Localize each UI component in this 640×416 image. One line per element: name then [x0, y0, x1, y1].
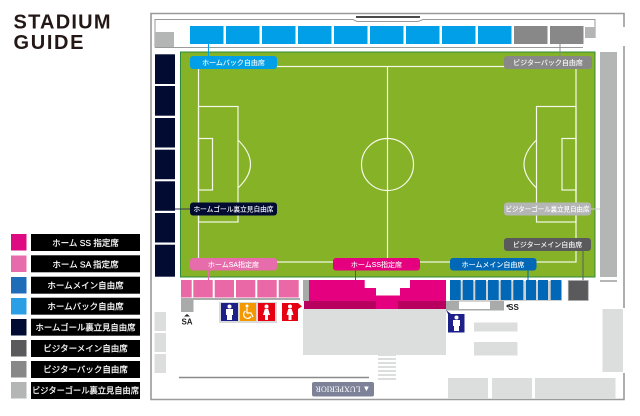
legend: home goal: ホームゴール裏立見自由席: [36, 322, 136, 332]
label: visitor goal: [504, 202, 591, 216]
legend: home goal: [11, 319, 140, 336]
legend: home main: ホームメイン自由席: [47, 280, 124, 290]
legend: home SA: ホーム SA 指定席: [52, 260, 119, 270]
title: STADIUM: [14, 12, 110, 34]
legend: visitor main: [11, 340, 140, 357]
restroom group: [219, 302, 277, 323]
SA gate label: SA: [181, 318, 193, 326]
stairs: [378, 354, 396, 380]
south road line: [179, 376, 369, 378]
legend: home SS: ホーム SS 指定席: [52, 238, 119, 248]
back stand gray corner blocks: [155, 27, 595, 47]
home SS seats: [304, 280, 446, 309]
home main seats: [450, 280, 562, 301]
stadium outer wall: [151, 14, 624, 400]
legend: visitor back: ビジターバック自由席: [43, 364, 128, 374]
label: visitor back: ビジターバック自由席: [513, 58, 583, 67]
pitch: [180, 52, 595, 277]
icon: accessible restroom: [240, 303, 256, 321]
legend: visitor goal: ビジターゴール裏立見自由席: [32, 386, 139, 396]
legend: home back: ホームバック自由席: [47, 302, 124, 312]
connector lines: [175, 44, 600, 281]
visitor back seats: [514, 26, 584, 44]
label: visitor back: [504, 56, 592, 69]
legend: home SS: [11, 234, 140, 251]
concourse platform: [303, 309, 446, 355]
legend: visitor back: [11, 361, 140, 378]
label: home main: ホームメイン自由席: [462, 260, 524, 269]
label: home SA: [190, 258, 277, 270]
home SS lower row: [304, 301, 446, 309]
visitor goal stand: [600, 52, 617, 282]
label: visitor main: [504, 238, 591, 251]
label: visitor goal: ビジターゴール裏立見自由席: [506, 204, 590, 214]
legend: home main: [11, 277, 140, 294]
label: home SS: [333, 258, 420, 270]
icon: men's restroom: [221, 303, 238, 321]
home back seats: [190, 26, 512, 44]
label: home goal: ホームゴール裏立見自由席: [194, 204, 274, 214]
label: home SS: ホームSS指定席: [351, 260, 402, 269]
SS gate strip: [446, 301, 504, 310]
icon: women's restroom with pointer: [282, 303, 302, 321]
home goal seats: [155, 54, 175, 277]
icon: men's restroom with pointer: [446, 310, 464, 332]
title: [14, 12, 110, 54]
home SA seats: [181, 280, 299, 298]
label: home back: ホームバック自由席: [202, 58, 265, 67]
SA stand base: [181, 280, 309, 312]
legend: [11, 234, 140, 399]
label: home main: [450, 258, 536, 270]
legend: home back: [11, 298, 140, 315]
visitor main seats: [568, 280, 588, 300]
legend: visitor goal: [11, 382, 140, 399]
icon: women's restroom: [258, 303, 275, 321]
label: home SA: ホームSA指定席: [208, 260, 259, 269]
SS gate label: SS: [508, 303, 520, 312]
title: GUIDE: [14, 32, 84, 54]
pitch markings: [198, 66, 576, 262]
LUXPERIOR sign: ▲ LUXPERIOR: [315, 384, 370, 393]
upper stand outline: [155, 17, 595, 48]
legend: home SA: [11, 255, 140, 272]
surrounding buildings: [154, 309, 623, 399]
label: home back: [190, 56, 277, 69]
label: home goal: [190, 202, 277, 216]
legend: visitor main: ビジターメイン自由席: [43, 344, 128, 354]
label: visitor main: ビジターメイン自由席: [513, 240, 582, 249]
LUXPERIOR sign: [312, 382, 374, 396]
